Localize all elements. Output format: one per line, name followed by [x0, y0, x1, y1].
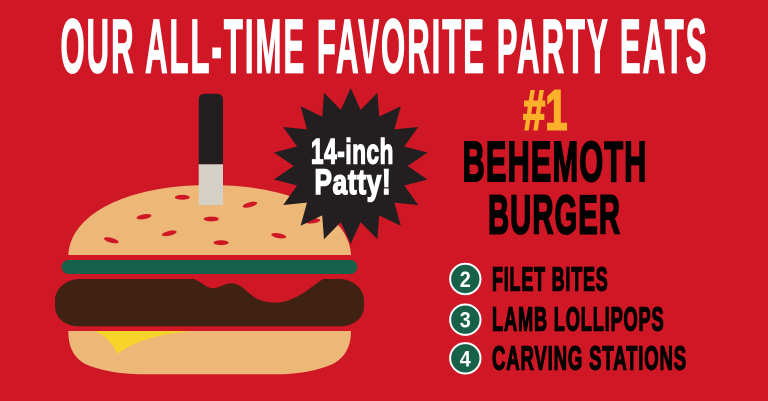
item 2: FILET BITES [492, 260, 608, 297]
top pick name: BURGER [488, 184, 621, 246]
starburst shape [274, 88, 428, 244]
sesame seeds [103, 195, 320, 245]
burger pick [199, 94, 223, 205]
item 4: 4 [460, 346, 471, 371]
bottom bun [68, 331, 351, 374]
top pick name [462, 130, 648, 246]
item 2: 2 [460, 267, 471, 292]
starburst callout [274, 88, 428, 244]
item 3 [450, 301, 664, 338]
patty [55, 279, 364, 326]
cheese [95, 331, 193, 354]
callout text [311, 132, 394, 202]
burger top bun [68, 185, 351, 255]
lettuce [62, 260, 357, 274]
item 2 [450, 260, 608, 297]
ranked list [450, 260, 687, 377]
rank number one: #1 [523, 78, 568, 142]
item 4 [450, 340, 687, 377]
illustration: burger [55, 94, 364, 374]
callout text: 14-inch [311, 132, 394, 172]
callout text: Patty! [314, 163, 392, 202]
item 3: 3 [460, 308, 471, 333]
